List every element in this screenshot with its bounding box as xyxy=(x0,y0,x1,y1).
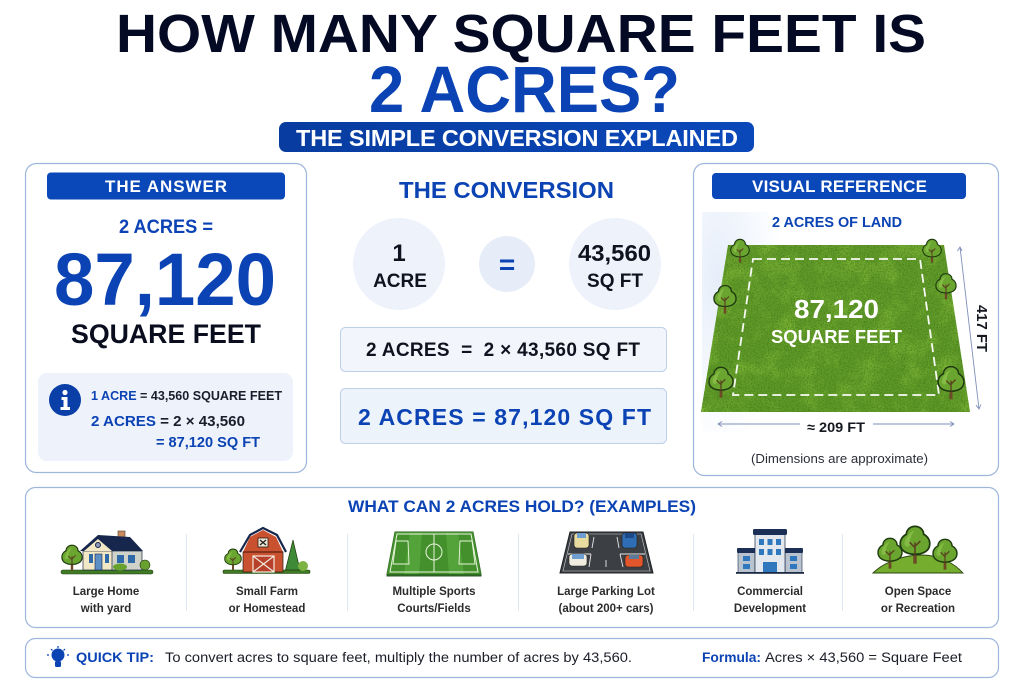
icon: commercial building xyxy=(736,529,804,574)
circle: 1 acre: ACRE xyxy=(373,271,427,292)
icon: light bulb xyxy=(47,646,69,667)
tip text: To convert acres to square feet, multiply the number of acres by 43,560. xyxy=(165,650,632,665)
icon: house xyxy=(61,531,153,574)
info line 1: 1 ACRE = 43,560 SQUARE FEET xyxy=(91,388,282,403)
label: commercial: Development xyxy=(734,603,806,615)
panel: quick tip xyxy=(26,638,998,678)
formula text: Acres × 43,560 = Square Feet xyxy=(765,650,962,665)
circle: 43,560 sq ft: 43,560 xyxy=(578,240,651,266)
label: 417 ft: 417 FT xyxy=(973,305,989,352)
label: small farm: Small Farm xyxy=(236,586,298,598)
trees xyxy=(709,239,964,399)
quick tip label: QUICK TIP: xyxy=(76,649,154,665)
panel: visual reference xyxy=(694,164,998,476)
label: sports fields: Courts/Fields xyxy=(397,603,471,615)
circle: 43,560 sq ft xyxy=(569,218,661,310)
panel: the conversion xyxy=(340,177,666,444)
circle: 1 acre xyxy=(353,218,445,310)
circle: equals xyxy=(479,236,535,292)
title xyxy=(116,4,926,126)
label: parking lot: (about 200+ cars) xyxy=(559,603,654,615)
label: sports fields: Multiple Sports xyxy=(392,586,476,598)
dimensions note: (Dimensions are approximate) xyxy=(751,452,928,466)
label: large home xyxy=(73,586,139,615)
label: open space: or Recreation xyxy=(881,603,955,615)
panel: the answer xyxy=(26,164,306,472)
formula label: Formula: xyxy=(702,650,761,665)
label: parking lot: Large Parking Lot xyxy=(557,586,655,598)
2 acres equals: 2 ACRES = xyxy=(119,217,213,238)
label: sports fields xyxy=(392,586,476,615)
examples heading: WHAT CAN 2 ACRES HOLD? (EXAMPLES) xyxy=(348,498,696,516)
result box xyxy=(340,388,666,444)
result box: 2 ACRES = 87,120 SQ FT xyxy=(358,404,651,430)
dashed boundary xyxy=(733,259,939,395)
answer header xyxy=(47,172,285,200)
panel: examples xyxy=(26,488,998,628)
icon: info xyxy=(49,384,81,416)
info line 3: = 87,120 SQ FT xyxy=(156,435,260,451)
grass plot xyxy=(701,245,970,412)
label: small farm: or Homestead xyxy=(229,603,305,615)
icon: parking lot xyxy=(560,532,653,573)
label: open space xyxy=(881,586,955,615)
circle: 43,560 sq ft: SQ FT xyxy=(587,271,643,292)
icon: open space xyxy=(873,526,963,573)
land heading: 2 ACRES OF LAND xyxy=(772,215,902,231)
title line 2: 2 ACRES? xyxy=(369,52,680,126)
label: small farm xyxy=(229,586,305,615)
conversion heading: THE CONVERSION xyxy=(399,177,614,203)
visual header: VISUAL REFERENCE xyxy=(752,177,927,196)
plot value: SQUARE FEET xyxy=(771,327,902,347)
big number: 87,120 xyxy=(54,238,276,321)
circle: equals: = xyxy=(499,249,515,280)
formula box: 2 ACRES = 2 × 43,560 SQ FT xyxy=(366,340,640,361)
label: 209 ft: ≈ 209 FT xyxy=(807,419,865,435)
arrow: height xyxy=(958,247,981,409)
info box xyxy=(38,373,293,461)
info line 2: 2 ACRES = 2 × 43,560 xyxy=(91,414,245,430)
square feet: SQUARE FEET xyxy=(71,319,261,349)
circle: 1 acre: 1 xyxy=(392,240,406,267)
subtitle pill: THE SIMPLE CONVERSION EXPLAINED xyxy=(296,125,738,151)
label: parking lot xyxy=(557,586,655,615)
plot value: 87,120 xyxy=(794,294,879,324)
label: large home: with yard xyxy=(80,603,131,615)
title line 1: HOW MANY SQUARE FEET IS xyxy=(116,4,926,64)
label: commercial: Commercial xyxy=(737,586,803,598)
label: large home: Large Home xyxy=(73,586,139,598)
visual header xyxy=(712,173,966,199)
icon: barn xyxy=(223,528,310,574)
label: commercial xyxy=(734,586,806,615)
label: open space: Open Space xyxy=(885,586,951,598)
formula box xyxy=(340,328,666,372)
arrow: width xyxy=(718,422,954,426)
icon: sports field xyxy=(387,532,481,576)
plot value xyxy=(771,294,902,347)
answer header: THE ANSWER xyxy=(105,177,227,196)
